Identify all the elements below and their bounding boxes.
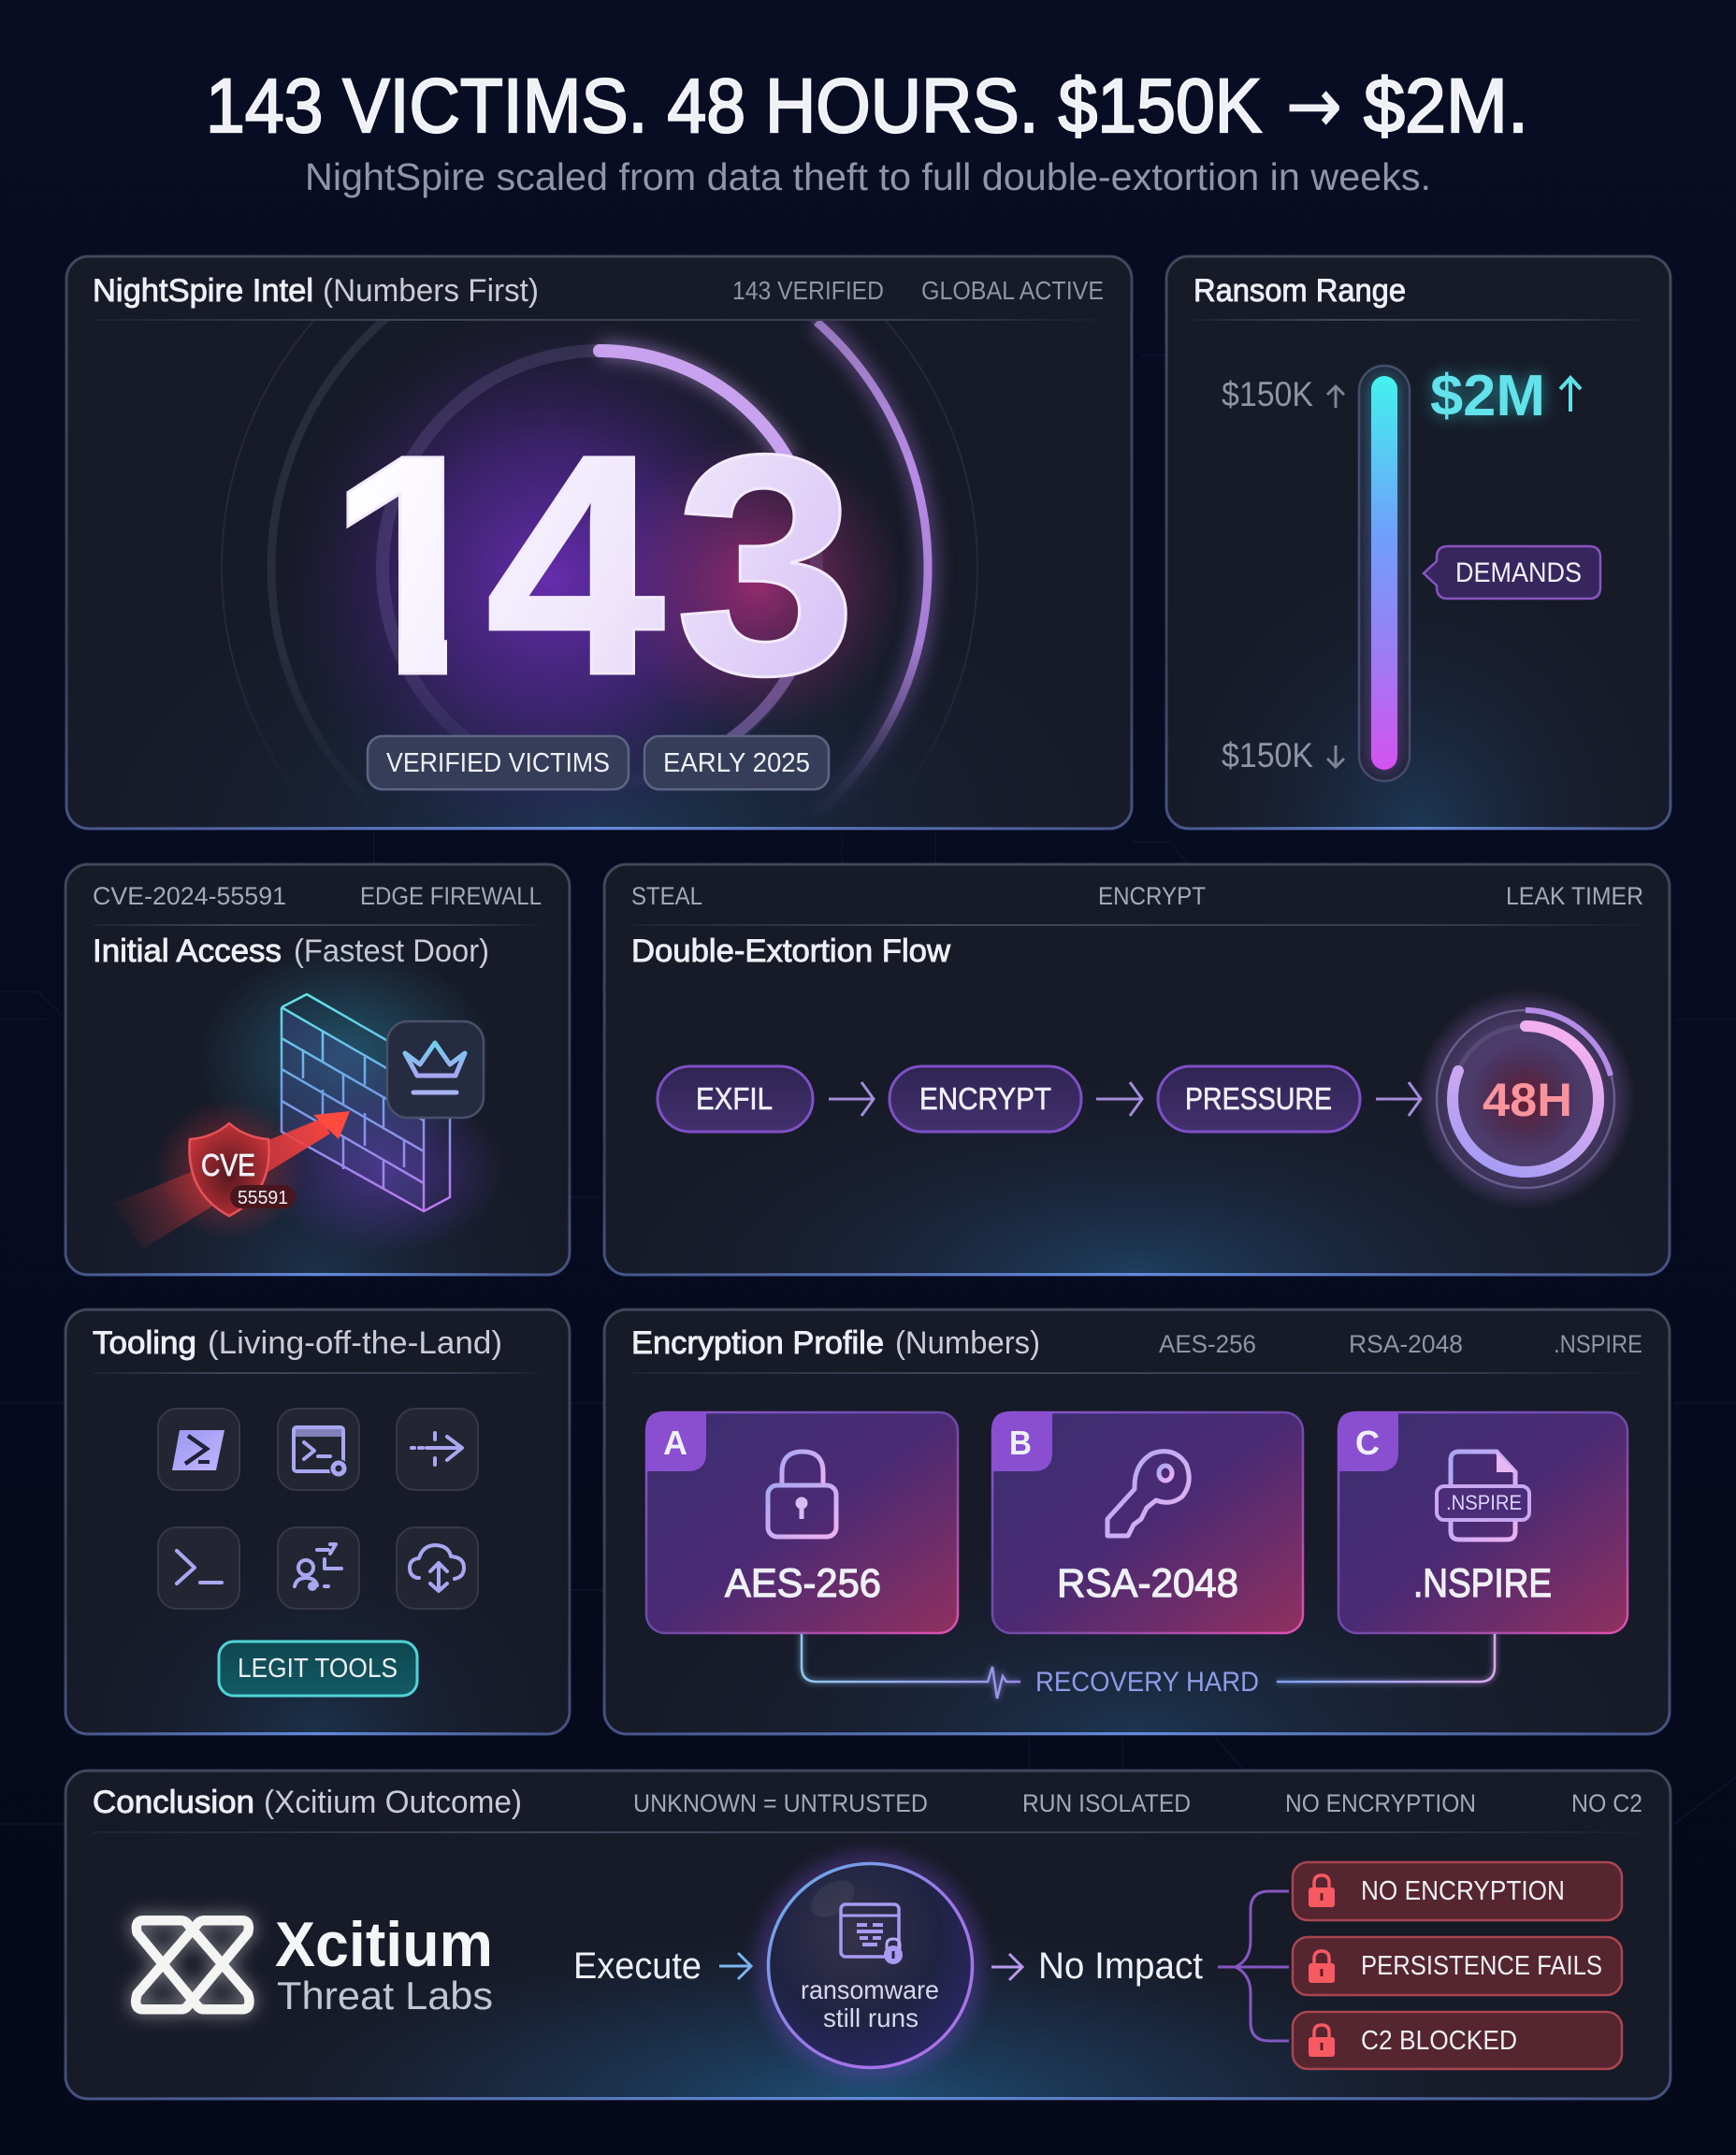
panel: Tooling (65, 1309, 570, 1735)
result: C2 blocked (1293, 2012, 1622, 2069)
tag: unknown untrusted: UNKNOWN = UNTRUSTED (633, 1789, 928, 1817)
sandbox bubble: ransomware (801, 1975, 939, 2004)
arrow (829, 1082, 874, 1116)
tag: global active: GLOBAL ACTIVE (921, 276, 1104, 305)
title: → (1286, 62, 1342, 151)
big number 143: 4 (485, 390, 667, 741)
branching connector (1218, 1891, 1289, 2041)
value: $2M: $2M (1430, 364, 1545, 428)
tag: NSPIRE: .NSPIRE (1554, 1330, 1642, 1358)
tag: leak timer: LEAK TIMER (1506, 882, 1643, 910)
arrow (719, 1953, 751, 1979)
heading (93, 273, 539, 309)
panel: Conclusion (65, 1771, 1671, 2100)
subtitle: NightSpire scaled from data theft to full double-extortion in weeks. (305, 155, 1431, 198)
step: encrypt: ENCRYPT (919, 1081, 1051, 1116)
tag: edge firewall: EDGE FIREWALL (360, 882, 542, 910)
icon: PowerShell (158, 1409, 239, 1490)
heading (93, 1325, 502, 1361)
tag: 143 verified: 143 VERIFIED (732, 276, 884, 305)
big number 143: 1 (326, 390, 501, 741)
card: AES-256 (645, 1411, 958, 1633)
badge: CVE shield: 55591 (238, 1188, 288, 1208)
pill: verified victims (368, 736, 629, 789)
timer: 48H (1415, 989, 1636, 1209)
label: bottom $150K: $150K (1222, 736, 1313, 774)
panel: Initial Access (65, 864, 570, 1276)
callout: demands (1424, 546, 1600, 599)
icon: ransomware window (841, 1904, 903, 1964)
tag: AES: AES-256 (1159, 1330, 1256, 1358)
icon: lock (1309, 2025, 1335, 2057)
callout: demands: DEMANDS (1455, 557, 1582, 588)
badge A (645, 1411, 706, 1471)
label: no impact: No Impact (1038, 1945, 1203, 1987)
rings and purple glow behind the number (221, 321, 978, 803)
tag: RSA: RSA-2048 (1349, 1330, 1463, 1358)
icon: terminal with gear (278, 1409, 359, 1490)
title: 143 VICTIMS. 48 HOURS. $150K (206, 64, 1262, 149)
panel: Ransom Range (1166, 256, 1671, 830)
heading: Encryption Profile (631, 1325, 884, 1361)
result: no encryption: NO ENCRYPTION (1361, 1876, 1565, 1906)
icon: encrypted file: .NSPIRE (1446, 1491, 1522, 1514)
icon: crown tile (387, 1021, 484, 1118)
card: .NSPIRE: .NSPIRE (1413, 1561, 1552, 1606)
arrow: exploit (113, 1111, 350, 1249)
tag: no encryption: NO ENCRYPTION (1285, 1789, 1476, 1817)
icon: padlock (768, 1452, 836, 1537)
icon: lock (1309, 1875, 1335, 1907)
panel: Double-Extortion Flow (604, 864, 1670, 1276)
logo: wordmark: Threat Labs (277, 1974, 493, 2018)
card: RSA-2048: RSA-2048 (1057, 1561, 1238, 1606)
badge: legit tools: LEGIT TOOLS (238, 1654, 398, 1684)
sandbox bubble (756, 1852, 984, 2080)
tag: run isolated: RUN ISOLATED (1022, 1789, 1191, 1817)
card: AES-256: AES-256 (725, 1561, 881, 1606)
heading: Tooling (93, 1325, 196, 1361)
heading: (Living-off-the-Land) (208, 1325, 502, 1361)
badge C: C (1355, 1424, 1380, 1462)
step: pressure (1158, 1066, 1360, 1132)
logo: wordmark (275, 1909, 493, 2018)
connector: recovery hard: RECOVERY HARD (1035, 1667, 1259, 1698)
heading: Initial Access (93, 933, 282, 969)
arrow (1376, 1082, 1421, 1116)
value: $2M: $2M (1430, 364, 1545, 428)
title: $2M. (1364, 64, 1528, 149)
card: .NSPIRE (1338, 1411, 1628, 1633)
timer: 48H: 48H (1483, 1074, 1572, 1126)
tag: encrypt: ENCRYPT (1098, 882, 1206, 910)
sandbox bubble: still runs (823, 2003, 919, 2032)
badge A: A (663, 1424, 687, 1462)
badge C (1338, 1411, 1398, 1471)
badge: CVE shield (154, 1099, 304, 1239)
heading: NightSpire Intel (93, 273, 313, 309)
result: C2 blocked: C2 BLOCKED (1361, 2026, 1517, 2056)
pill: early 2025: EARLY 2025 (663, 748, 810, 778)
heading: (Numbers First) (323, 273, 539, 309)
badge: legit tools (219, 1642, 417, 1696)
heading (93, 1785, 522, 1820)
heading: Double-Extortion Flow (631, 933, 950, 969)
pill: early 2025 (644, 736, 829, 789)
result: persistence fails: PERSISTENCE FAILS (1361, 1951, 1602, 1981)
step: pressure: PRESSURE (1185, 1081, 1332, 1116)
card: RSA-2048 (991, 1411, 1303, 1633)
big number 143: 3 (674, 390, 858, 741)
icon: user and tools (278, 1527, 359, 1609)
icon: key (1107, 1452, 1189, 1536)
badge B: B (1009, 1424, 1032, 1462)
gauge bar (1359, 366, 1410, 781)
icon: command prompt (158, 1527, 239, 1609)
heading: Conclusion (93, 1785, 254, 1820)
arrow (1096, 1082, 1142, 1116)
big number 143 (346, 453, 847, 679)
heading: (Fastest Door) (294, 933, 489, 969)
icon: lock (1309, 1951, 1335, 1983)
step: encrypt (890, 1066, 1081, 1132)
logo: wordmark: Xcitium (275, 1909, 493, 1980)
tag: no C2: NO C2 (1571, 1789, 1642, 1817)
tag: CVE id: CVE-2024-55591 (93, 882, 286, 910)
step: exfil (658, 1066, 813, 1132)
label: execute: Execute (573, 1945, 702, 1987)
logo: Xcitium mark (136, 1920, 249, 2009)
illustration: firewall (196, 945, 505, 1253)
badge: CVE shield: CVE (201, 1148, 255, 1182)
label: top $150K: $150K (1222, 375, 1313, 413)
panel: NightSpire Intel (65, 254, 1134, 831)
badge B (991, 1411, 1052, 1471)
heading (93, 933, 489, 969)
heading (631, 1325, 1040, 1361)
heading: (Xcitium Outcome) (264, 1785, 522, 1820)
icon: encrypted file (1437, 1452, 1529, 1540)
heading: (Numbers) (895, 1325, 1040, 1361)
connector: recovery hard (802, 1634, 1495, 1699)
pill: verified victims: VERIFIED VICTIMS (386, 748, 610, 778)
tag: steal: STEAL (631, 882, 702, 910)
arrow (991, 1954, 1022, 1980)
icon: cloud transfer (397, 1527, 478, 1609)
result: no encryption (1293, 1862, 1622, 1920)
heading: Ransom Range (1194, 273, 1406, 309)
step: exfil: EXFIL (696, 1081, 773, 1116)
icon: lateral arrow (397, 1409, 478, 1490)
panel: Encryption Profile (604, 1309, 1670, 1735)
result: persistence fails (1293, 1937, 1622, 1995)
